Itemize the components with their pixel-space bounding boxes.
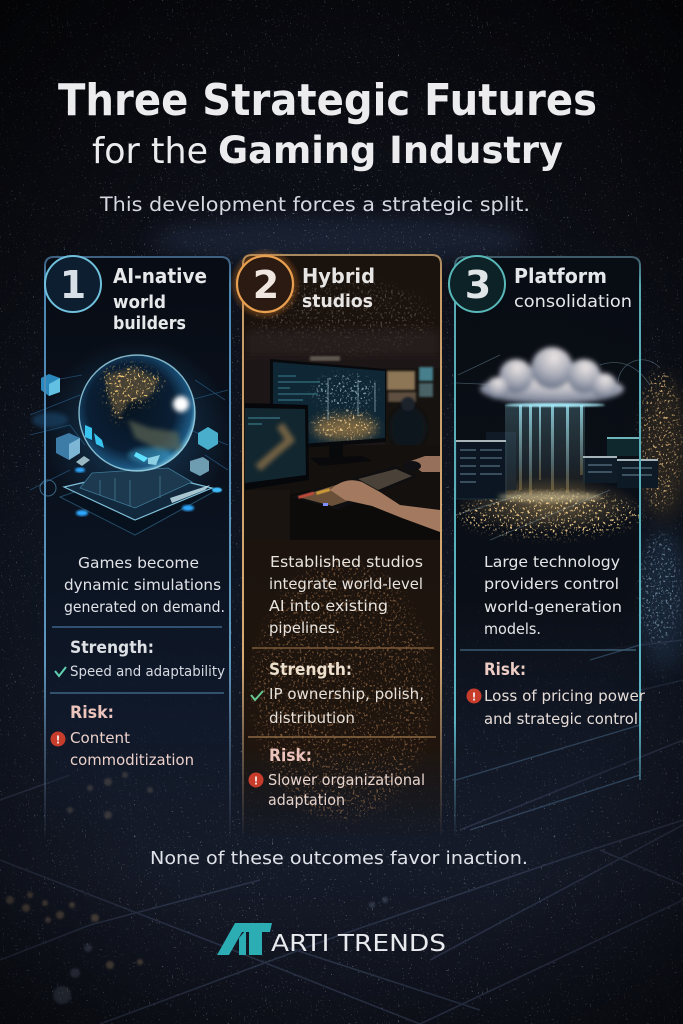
logo: Arti Trends: ARTI TRENDS [271,931,446,957]
card 3 description: providers control [484,575,619,593]
card 2 risk: ! [253,774,259,788]
number badge 3 [449,256,505,312]
number badge 3: 3 [465,263,491,307]
card 3 heading: consolidation [514,292,632,312]
globe [79,355,195,471]
title: Gaming Industry [218,129,563,172]
main monitor [270,359,386,466]
server racks [456,432,658,499]
card 2 risk: Risk: [269,746,312,766]
card 2 background [243,255,441,835]
card 1 background [45,257,230,837]
panel: Hybrid studios [229,248,450,835]
card 1 description: generated on demand. [64,598,225,616]
logo: Arti Trends [217,923,446,957]
card 1 risk [50,703,194,769]
card 2 heading: Hybrid [302,264,375,288]
closing statement: None of these outcomes favor inaction. [150,849,528,869]
card 1 strength: Speed and adaptability [70,664,225,680]
card 3 risk: Risk: [484,660,526,680]
logo mark [217,923,272,955]
card 2 description: AI into existing [269,597,388,615]
card 2 description [269,553,423,637]
card 3 background [454,257,640,835]
card 1 description: dynamic simulations [64,576,221,594]
keyboard [297,469,412,506]
card 1 risk: commoditization [70,751,194,769]
card 2 strength: distribution [269,709,355,727]
number badge 1: 1 [60,263,86,307]
illustration: glowing globe on platform [30,338,232,535]
card 1 heading [113,264,207,334]
card 3 risk: ! [471,690,477,704]
card 2 strength [251,660,424,727]
card 2 description: integrate world-level [269,575,423,593]
card 2 description: Established studios [270,553,423,571]
light beams [505,405,585,495]
card 1 description: Games become [78,554,199,572]
card 2 risk: Slower organizational [268,771,425,789]
card 2 frame [243,255,441,835]
card 2 risk: adaptation [268,791,345,809]
panel: Platform consolidation [449,256,680,835]
hands [330,456,440,532]
cloud [480,347,624,404]
side monitor [245,403,309,490]
title: Three Strategic Futures [58,75,597,126]
illustration: cloud over data centres [456,347,680,645]
card 1 risk: Content [70,729,130,747]
card 1 frame [45,257,230,837]
card 3 heading: Platform [514,264,607,288]
number badge 1 [45,256,101,312]
card 3 description: Large technology [484,553,620,571]
card 3 frame [455,257,640,835]
card 3 heading [514,264,632,312]
illustration: developer desk with monitors [235,330,450,540]
card 3 risk: Loss of pricing power [484,687,646,705]
data cubes [41,374,218,476]
card 3 description [484,553,622,638]
card 3 risk [466,660,646,728]
card 1 heading: AI-native [113,264,207,288]
card 3 description: models. [484,620,541,638]
card 1 heading: builders [113,314,186,334]
card 1 heading: world [113,293,166,313]
number badge 2 [229,248,301,320]
card 1 description [64,554,225,616]
card 2 description: pipelines. [269,619,340,637]
subtitle: This development forces a strategic split. [99,193,530,216]
card 2 heading [302,264,375,312]
platform [60,468,222,535]
card 2 strength: IP ownership, polish, [269,685,424,703]
panel: AI-native world builders [30,256,232,837]
title [58,75,597,172]
card 1 risk: ! [55,734,61,746]
card 2 risk [248,746,425,809]
card 2 heading: studios [302,291,373,312]
card 1 risk: Risk: [70,703,114,723]
card 3 description: world-generation [484,598,622,616]
card 2 strength: Strength: [269,660,352,680]
number badge 2: 2 [253,263,279,307]
card 1 strength [55,638,225,680]
title: for the [92,131,208,172]
card 1 strength: Strength: [70,638,154,658]
card 3 risk: and strategic control [484,710,638,728]
